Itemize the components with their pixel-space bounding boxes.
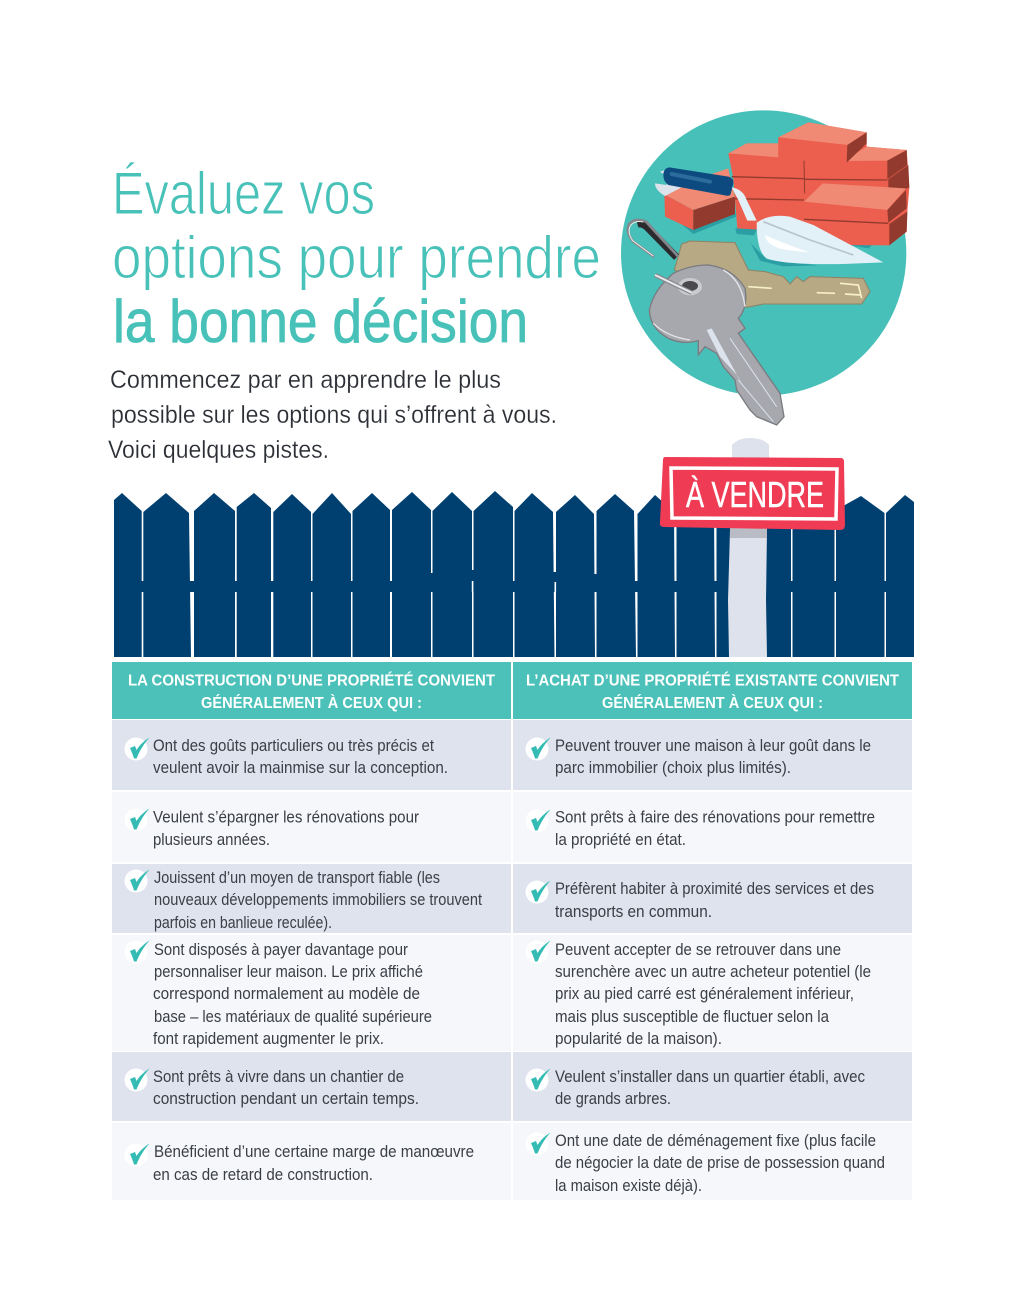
- row 3 left: nouveaux développements immobiliers se trouvent: [154, 891, 482, 909]
- row 2 left: plusieurs années.: [153, 831, 270, 849]
- icon: trowel: [655, 167, 883, 264]
- illustration: bricks, trowel and keys: [621, 110, 909, 425]
- row 5 left: Sont prêts à vivre dans un chantier de: [153, 1068, 404, 1086]
- row 4 right: [513, 935, 912, 1051]
- icon: key ring: [628, 220, 678, 257]
- row 6 right: de négocier la date de prise de possession quand: [555, 1154, 885, 1172]
- intro text: [108, 366, 557, 464]
- table header: achat: GÉNÉRALEMENT À CEUX QUI :: [602, 695, 823, 712]
- row 2 right: la propriété en état.: [555, 831, 686, 849]
- row 3 right: [513, 864, 912, 933]
- sign: À VENDRE: [660, 457, 845, 530]
- row 1 right: [513, 720, 912, 790]
- row 3 left: parfois en banlieue reculée).: [154, 914, 332, 932]
- row 4 right: Peuvent accepter de se retrouver dans une: [555, 941, 841, 959]
- sign post: [728, 438, 769, 657]
- row 3 right: transports en commun.: [555, 903, 712, 921]
- table header: achat: L’ACHAT D’UNE PROPRIÉTÉ EXISTANTE CONVIENT: [526, 672, 899, 690]
- row 4 right: popularité de la maison).: [555, 1030, 722, 1048]
- row 3 right: Préfèrent habiter à proximité des services et des: [555, 880, 874, 898]
- row 4 left: base – les matériaux de qualité supérieure: [154, 1008, 432, 1026]
- row 5 left: construction pendant un certain temps.: [153, 1090, 419, 1108]
- right column: achat: [513, 720, 912, 1200]
- icon: silver key: [649, 265, 784, 425]
- row 6 left: [112, 1123, 511, 1200]
- row 4 left: correspond normalement au modèle de: [153, 985, 420, 1003]
- table header: construction: LA CONSTRUCTION D’UNE PROPRIÉTÉ CONVIENT: [128, 672, 496, 690]
- row 6 left: en cas de retard de construction.: [153, 1166, 373, 1184]
- table header: achat: [513, 662, 912, 719]
- row 5 left: [112, 1052, 511, 1121]
- row 4 right: mais plus susceptible de fluctuer selon la: [555, 1008, 829, 1026]
- row 4 left: Sont disposés à payer davantage pour: [154, 941, 409, 959]
- row 6 right: Ont une date de déménagement fixe (plus facile: [555, 1132, 876, 1150]
- row 4 right: prix au pied carré est généralement inférieur,: [555, 985, 854, 1003]
- row 1 left: [112, 720, 511, 790]
- row 6 left: Bénéficient d’une certaine marge de manœuvre: [154, 1143, 474, 1161]
- row 4 left: font rapidement augmenter le prix.: [153, 1030, 384, 1048]
- row 1 right: parc immobilier (choix plus limités).: [555, 759, 791, 777]
- row 2 right: [513, 792, 912, 862]
- sign: À VENDRE: À VENDRE: [686, 474, 824, 515]
- row 6 right: la maison existe déjà).: [555, 1177, 702, 1195]
- row 5 right: [513, 1052, 912, 1121]
- row 3 left: [112, 864, 511, 933]
- title: la bonne décision: [113, 288, 528, 355]
- row 2 left: Veulent s’épargner les rénovations pour: [153, 808, 420, 826]
- fence: [114, 491, 914, 657]
- title: Évaluez vos: [112, 160, 375, 227]
- row 1 left: veulent avoir la mainmise sur la conception.: [153, 759, 448, 777]
- icon: tan key: [674, 241, 870, 307]
- intro text: Voici quelques pistes.: [108, 436, 329, 464]
- teal circle: [621, 110, 906, 396]
- left column: construction: [112, 720, 511, 1200]
- row 4 left: personnaliser leur maison. Le prix affiché: [154, 963, 423, 981]
- row 4 right: surenchère avec un autre acheteur potentiel (le: [555, 963, 871, 981]
- title: [112, 160, 601, 355]
- intro text: Commencez par en apprendre le plus: [110, 366, 501, 394]
- row 6 right: [513, 1123, 912, 1200]
- row 4 left: [112, 935, 511, 1051]
- row 5 right: Veulent s’installer dans un quartier établi, avec: [555, 1068, 865, 1086]
- row 3 left: Jouissent d’un moyen de transport fiable (les: [154, 869, 440, 887]
- table header: construction: [112, 662, 511, 719]
- row 2 right: Sont prêts à faire des rénovations pour remettre: [555, 808, 875, 826]
- title: options pour prendre: [112, 224, 601, 291]
- row 5 right: de grands arbres.: [555, 1090, 671, 1108]
- table header: construction: GÉNÉRALEMENT À CEUX QUI :: [201, 695, 422, 712]
- row 1 right: Peuvent trouver une maison à leur goût dans le: [555, 737, 871, 755]
- icon: brick pile: [664, 122, 909, 245]
- row 1 left: Ont des goûts particuliers ou très précis et: [153, 737, 434, 755]
- row 2 left: [112, 792, 511, 862]
- intro text: possible sur les options qui s’offrent à vous.: [111, 401, 557, 429]
